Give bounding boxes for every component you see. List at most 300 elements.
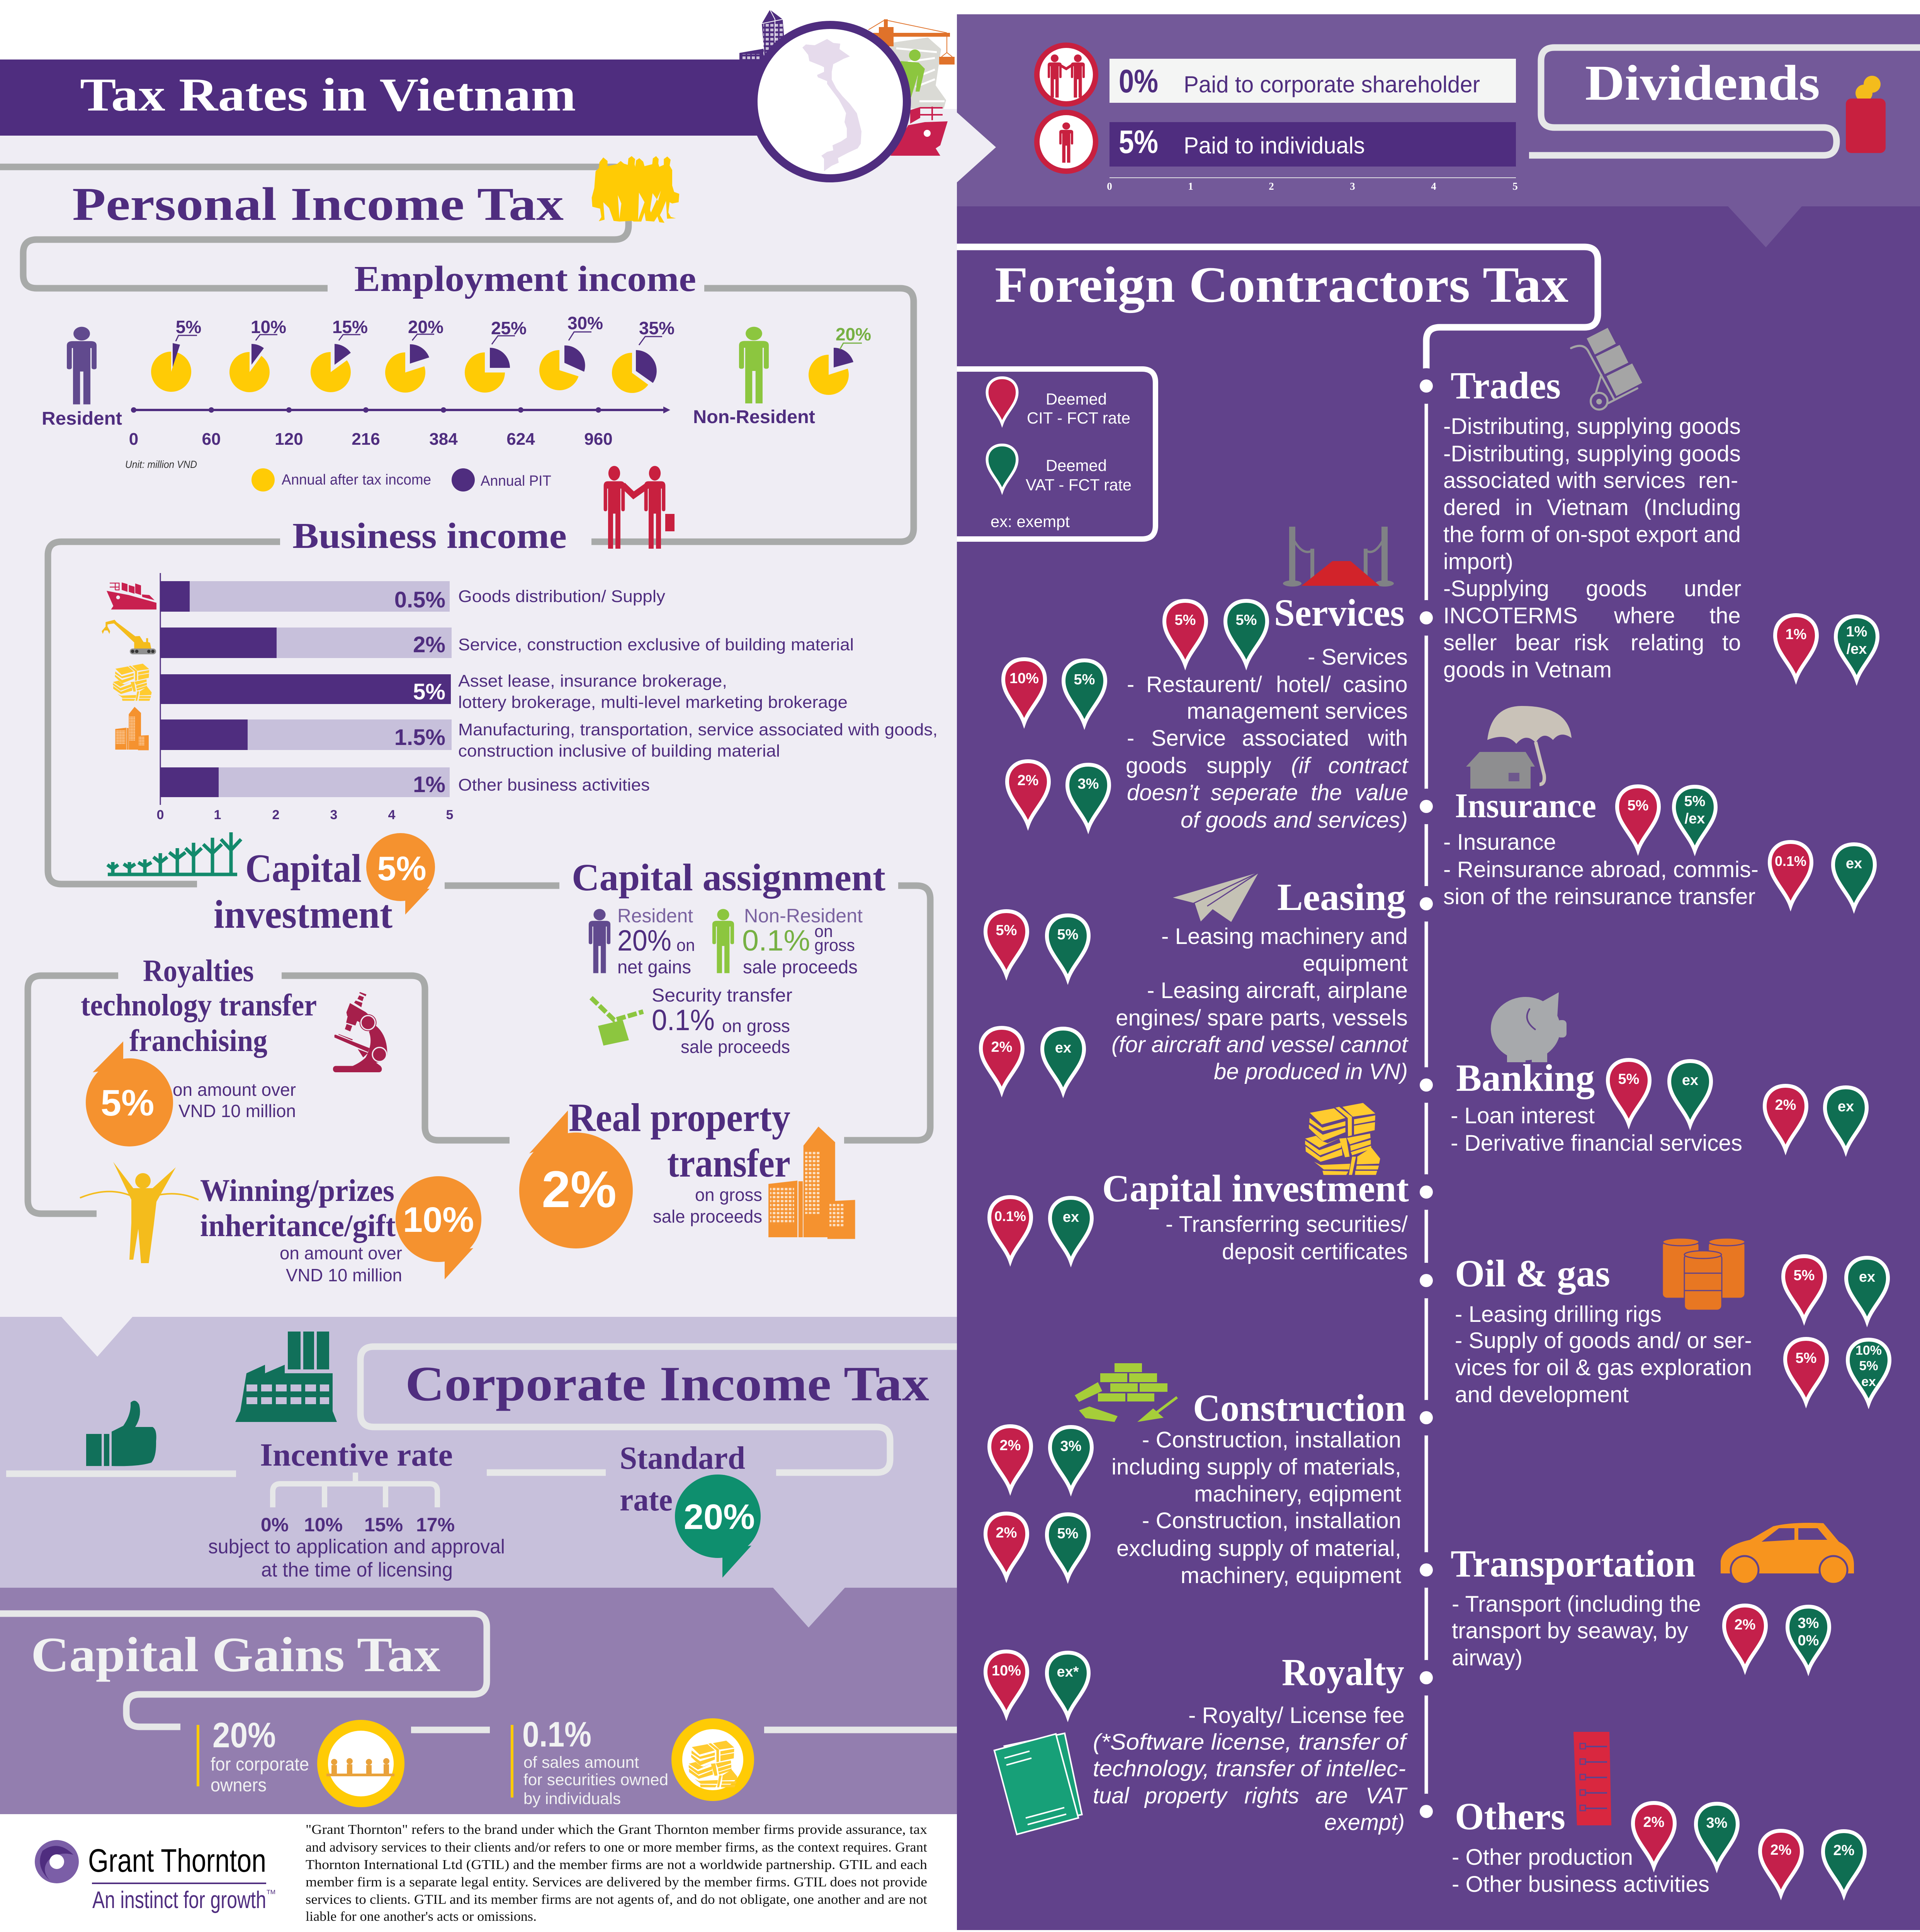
- rates: insurance: /ex: [1685, 811, 1705, 827]
- text: royalty description: tual: [1093, 1783, 1130, 1808]
- text: incentive rate note: subject to application and approval: [208, 1536, 505, 1558]
- footer: legal disclaimer: and advisory services to their clients and/or refers to one or more member firms, as the context requires. Grant: [306, 1840, 927, 1855]
- text: capital investment description: deposit certificates: [1222, 1239, 1408, 1264]
- block: individuals rate: [511, 1715, 668, 1808]
- heading: banking: Banking: [1456, 1056, 1595, 1099]
- panel: capital gains tax background: [0, 1588, 957, 1814]
- text: services description: associated: [1242, 726, 1349, 751]
- callout: winnings 10%: 10%: [403, 1200, 474, 1240]
- rates: insurance: ex: [1846, 855, 1862, 872]
- rates: oil and gas: ex: [1859, 1269, 1875, 1285]
- panel: personal income tax background: [0, 109, 957, 1317]
- text: real property base: [653, 1185, 762, 1226]
- text: services description: seperate: [1211, 780, 1298, 805]
- rates: insurance: 5%: [1628, 798, 1648, 814]
- rates: others: 2%: [1770, 1842, 1791, 1858]
- text: oil and gas description: [1455, 1302, 1752, 1407]
- icon: non-resident person: [739, 327, 769, 403]
- text: capital investment description: - Transferring securities/: [1166, 1212, 1408, 1237]
- text: trades description: seller: [1443, 630, 1497, 655]
- heading: others: Others: [1455, 1795, 1565, 1838]
- text: construction description: - Construction, installation: [1142, 1508, 1401, 1533]
- arrow: pointer from dividends: [1728, 206, 1802, 247]
- chart: income axis with thresholds: 960: [584, 430, 613, 449]
- text: royalty description: rights: [1244, 1783, 1299, 1808]
- heading: royalty: Royalty: [1282, 1651, 1404, 1694]
- chart: dividend bars: Paid to corporate shareholder: [1184, 71, 1480, 97]
- rates: services: 3%: [1078, 776, 1099, 792]
- chart: business income bars: 5: [446, 808, 453, 822]
- icon: handshake: [604, 466, 675, 549]
- heading: insurance: Insurance: [1455, 787, 1596, 825]
- text: transportation description: [1452, 1592, 1701, 1670]
- rates: royalty: ex*: [1057, 1664, 1079, 1680]
- connector lines: [0, 1614, 957, 1730]
- icon: corporate shareholders: [1037, 45, 1096, 104]
- legend: pin colours: CIT - FCT rate: [1027, 409, 1130, 427]
- footer: legal disclaimer: liable for one another's acts or omissions.: [306, 1909, 537, 1924]
- text: services description: supply: [1206, 753, 1271, 778]
- block: capital assignment non-resident: [712, 905, 863, 978]
- text: incentive rate values: [261, 1514, 455, 1536]
- legend: pie colours: Annual after tax income: [282, 472, 431, 488]
- text: incentive rate values: 17%: [416, 1514, 455, 1536]
- chart: dividend bars: 2: [1269, 180, 1274, 192]
- rates: banking: [1608, 1060, 1867, 1151]
- chart: dividend bars: 1: [1188, 180, 1193, 192]
- arrow: pointer into dividends: [957, 112, 996, 182]
- text: services description: contract: [1328, 753, 1409, 778]
- text: winnings threshold: [280, 1243, 402, 1285]
- icon: excavator: [102, 620, 156, 654]
- text: insurance description: - Insurance: [1443, 830, 1556, 855]
- text: services description: the: [1311, 780, 1342, 805]
- rates: oil and gas: ex: [1861, 1374, 1876, 1389]
- block: security transfer: [652, 985, 792, 1057]
- text: services description: with: [1368, 726, 1408, 751]
- chart: income axis with thresholds: [129, 406, 670, 449]
- callout: royalties 5%: 5%: [101, 1082, 154, 1124]
- block: capital investment: [989, 1103, 1409, 1264]
- text: services description: casino: [1343, 672, 1408, 697]
- heading: real property transfer: [569, 1095, 790, 1185]
- chart: business income bars: Goods distribution/ Supply: [458, 587, 665, 606]
- footer: Grant Thornton logo: An instinct for growth: [92, 1887, 266, 1913]
- heading: foreign contractors tax: Foreign Contractors Tax: [995, 256, 1568, 313]
- footer: legal disclaimer: services to clients. GTIL and its member firms are not agents of, and do not obligate, one another and are not: [306, 1892, 927, 1907]
- text: oil and gas description: - Supply of goods and/ or ser-: [1455, 1328, 1752, 1353]
- icon: orange buildings: [768, 1127, 855, 1239]
- label: non-resident: Non-Resident: [693, 407, 815, 427]
- text: royalty description: exempt): [1324, 1810, 1405, 1835]
- text: trades description: under: [1684, 576, 1741, 601]
- text: trades description: Vietnam: [1547, 495, 1629, 520]
- legend: pin colours: Deemed: [1046, 390, 1107, 408]
- block: capital assignment non-resident: gross: [814, 936, 855, 955]
- chart: business income bars: 1%: [413, 772, 445, 797]
- heading: services: Services: [1274, 591, 1405, 634]
- block: capital assignment resident: on: [676, 936, 695, 955]
- section: capital gains tax: [0, 1614, 957, 1808]
- text: banking description: [1451, 1103, 1742, 1156]
- heading: employment income: Employment income: [354, 259, 696, 299]
- chart: dividend bars: [1107, 59, 1518, 192]
- text: royalty description: technology, transfer of intellec-: [1093, 1756, 1406, 1781]
- text: trades description: goods in Vetnam: [1443, 657, 1612, 682]
- chart: progressive tax rate pies: 15%: [332, 317, 368, 337]
- rates: others: 3%: [1706, 1815, 1727, 1831]
- text: services description: value: [1355, 780, 1409, 805]
- rates: trades: 1%: [1786, 626, 1806, 643]
- block: oil and gas: [1455, 1238, 1889, 1407]
- text: incentive rate values: 0%: [261, 1514, 289, 1536]
- heading: winning, prizes, inheritance, gift: Winning/prizes: [200, 1173, 394, 1208]
- text: leasing description: - Leasing aircraft, airplane: [1147, 978, 1408, 1003]
- callout: real property 2%: [519, 1111, 633, 1248]
- text: trades description: risk: [1574, 630, 1609, 655]
- icon: resident person: [67, 327, 97, 404]
- footer: Grant Thornton logo: Grant Thornton: [88, 1842, 266, 1879]
- title: Tax Rates in Vietnam: [80, 69, 576, 121]
- rates: leasing: [981, 911, 1089, 1092]
- icon: runner at finish line: [80, 1162, 199, 1263]
- block: individuals rate: 0.1%: [522, 1715, 591, 1754]
- block: banking: [1451, 992, 1867, 1156]
- text: winnings threshold: VND 10 million: [286, 1265, 402, 1285]
- text: services description: -: [1127, 672, 1134, 697]
- block: royalty: [985, 1651, 1408, 1835]
- bracket: incentive rates: [273, 1473, 437, 1507]
- block: leasing: [981, 872, 1409, 1092]
- legend: pin colours: ex: exempt: [991, 512, 1070, 531]
- icon: money stack: [113, 664, 152, 701]
- title banner: [0, 60, 773, 136]
- chart: dividend bars: 0: [1107, 180, 1112, 192]
- text: insurance description: sion of the reinsurance transfer: [1443, 884, 1755, 909]
- chart: business income bars: Service, construction exclusive of building material: [458, 635, 854, 654]
- section: foreign contractors tax: [957, 247, 1889, 1897]
- icon: piggy bank: [1491, 992, 1567, 1062]
- rates: trades: /ex: [1847, 641, 1867, 657]
- heading: standard rate: [620, 1440, 745, 1518]
- text: services description: (if: [1291, 753, 1312, 778]
- rates: others: [1633, 1803, 1865, 1895]
- text: construction description: - Construction, installation: [1142, 1427, 1401, 1452]
- rates: construction: 3%: [1060, 1438, 1081, 1454]
- text: incentive rate note: at the time of licensing: [261, 1559, 453, 1581]
- text: services description: Service: [1151, 726, 1226, 751]
- text: banking description: - Derivative financial services: [1451, 1131, 1742, 1156]
- rates: insurance: [1617, 786, 1875, 908]
- rates: transportation: 3%: [1798, 1615, 1819, 1631]
- text: transportation description: - Transport (including the: [1452, 1592, 1701, 1617]
- rates: banking: 5%: [1618, 1071, 1639, 1087]
- rates: capital investment: [989, 1197, 1092, 1262]
- rates: royalty: [985, 1651, 1089, 1716]
- footer: Grant Thornton logo: [35, 1840, 275, 1913]
- chart: business income bars: 5%: [413, 679, 445, 704]
- block: trades: [1443, 328, 1878, 682]
- text: incentive rate note: [208, 1536, 505, 1581]
- block: individuals rate: for securities owned: [523, 1770, 668, 1789]
- block: security transfer: Security transfer: [652, 985, 792, 1006]
- block: transportation: [1451, 1523, 1854, 1670]
- icon: individual: [1037, 112, 1096, 171]
- text: leasing description: - Leasing machinery and: [1161, 924, 1408, 949]
- heading: personal income tax: Personal Income Tax: [72, 178, 564, 230]
- block: corporate owners rate: owners: [211, 1775, 267, 1796]
- chart: income axis with thresholds: 120: [275, 430, 303, 449]
- chart: business income bars: lottery brokerage, multi-level marketing brokerage: [458, 693, 848, 712]
- text: insurance description: [1443, 830, 1759, 909]
- rates: capital investment: ex: [1063, 1209, 1079, 1225]
- callout: standard rate 20%: [675, 1475, 761, 1578]
- rates: construction: 2%: [1000, 1437, 1021, 1454]
- legend: pie colours: Annual PIT: [481, 473, 551, 489]
- legend: pin colours: Deemed: [1046, 456, 1107, 474]
- text: construction description: machinery, equipment: [1181, 1563, 1401, 1588]
- text: trades description: in: [1515, 495, 1533, 520]
- icon: orange building: [115, 707, 149, 750]
- block: capital assignment resident: [589, 905, 695, 978]
- text: trades description: bear: [1515, 630, 1560, 655]
- chart: business income bars: construction inclusive of building material: [458, 742, 780, 760]
- footer: legal disclaimer: [306, 1822, 928, 1924]
- chart: progressive tax rate pies: 20%: [408, 317, 443, 337]
- rates: banking: 2%: [1775, 1097, 1796, 1113]
- rates: trades: [1775, 615, 1878, 680]
- block: individuals rate: of sales amount: [523, 1753, 639, 1771]
- rates: construction: [985, 1426, 1092, 1578]
- block: construction: [985, 1363, 1406, 1588]
- chart: income axis with thresholds: 624: [506, 430, 535, 449]
- rates: oil and gas: [1783, 1256, 1889, 1403]
- legend: pie colours: [251, 468, 551, 492]
- callout: capital investment 5%: 5%: [377, 849, 426, 888]
- timeline: [1409, 368, 1444, 1829]
- rates: oil and gas: 5%: [1859, 1359, 1878, 1373]
- legend: pin colours: [957, 369, 1155, 539]
- rates: leasing: 5%: [996, 922, 1017, 939]
- icon: money stack: [1305, 1103, 1380, 1175]
- text: trades description: to: [1722, 630, 1741, 655]
- block: capital assignment resident: Resident: [617, 905, 693, 927]
- block: capital assignment non-resident: on: [814, 922, 833, 941]
- block: services: [1003, 527, 1409, 833]
- icon: Vietnam map in circle: [753, 25, 907, 179]
- note: unit: Unit: million VND: [125, 459, 197, 470]
- heading: business income: Business income: [292, 516, 567, 556]
- icon: ship: [107, 582, 156, 609]
- block: capital assignment non-resident: sale proceeds: [743, 957, 858, 978]
- text: trades description: -Distributing, supplying goods: [1443, 441, 1741, 466]
- footer: legal disclaimer: "Grant Thornton" refers to the brand under which the Grant Thornton member firms provide assurance, tax: [306, 1822, 928, 1837]
- text: transportation description: airway): [1452, 1645, 1522, 1670]
- text: banking description: - Loan interest: [1451, 1103, 1595, 1128]
- chart: business income bars: 4: [388, 808, 396, 822]
- rates: transportation: 0%: [1798, 1633, 1819, 1649]
- icon: red carpet: [1283, 527, 1394, 587]
- chart: business income bars: 0: [157, 808, 164, 822]
- text: royalties threshold: on amount over: [173, 1080, 296, 1100]
- text: trades description: import): [1443, 549, 1513, 574]
- rates: leasing: ex: [1055, 1040, 1071, 1056]
- heading: construction: Construction: [1193, 1386, 1406, 1429]
- chart: business income bars: 3: [330, 808, 337, 822]
- heading: transportation: Transportation: [1451, 1542, 1696, 1585]
- arrow: pointer into capital gains tax: [773, 1588, 845, 1628]
- chart: income axis with thresholds: 0: [129, 430, 138, 449]
- rates: insurance: 0.1%: [1775, 853, 1806, 869]
- heading: royalties: Royalties: [143, 954, 254, 988]
- label: resident: Resident: [42, 408, 122, 429]
- text: leasing description: be produced in VN): [1214, 1059, 1408, 1084]
- heading: standard rate: rate: [620, 1482, 673, 1518]
- rates: services: 10%: [1009, 670, 1039, 687]
- text: trades description: relating: [1631, 630, 1704, 655]
- text: trades description: with: [1556, 468, 1597, 493]
- rates: construction: 5%: [1057, 1526, 1078, 1542]
- rates: oil and gas: 5%: [1794, 1267, 1815, 1284]
- text: services description: [1126, 645, 1409, 833]
- text: trades description: ren-: [1698, 468, 1738, 493]
- text: services description: of goods and services): [1181, 808, 1408, 833]
- chart: business income bars: Manufacturing, transportation, service associated with goods,: [458, 720, 938, 739]
- rates: transportation: 2%: [1735, 1617, 1755, 1633]
- text: oil and gas description: vices for oil & gas exploration: [1455, 1355, 1752, 1380]
- text: royalties threshold: [173, 1080, 296, 1121]
- text: leasing description: (for aircraft and vessel cannot: [1111, 1032, 1409, 1057]
- panel: dividends background: [957, 14, 1920, 206]
- header illustration: city, crane, worker and ship: [739, 10, 955, 156]
- text: others description: - Other business activities: [1452, 1872, 1709, 1897]
- text: royalty description: are: [1315, 1783, 1348, 1808]
- rates: construction: 2%: [996, 1525, 1017, 1541]
- chart: progressive tax rate pies: 35%: [639, 318, 675, 338]
- heading: corporate income tax: Corporate Income Tax: [405, 1356, 929, 1411]
- text: royalty description: [1093, 1703, 1408, 1835]
- chart: business income bars: 1.5%: [394, 725, 445, 750]
- chart: progressive tax rate pies: 30%: [568, 313, 603, 333]
- heading: capital investment: Capital: [245, 846, 362, 891]
- text: leasing description: equipment: [1303, 951, 1408, 976]
- heading: trades: Trades: [1451, 364, 1561, 407]
- footer: legal disclaimer: member firm is a separate legal entity. Services are delivered by the member firms. GTIL does not provide: [306, 1874, 927, 1889]
- icon: paper plane: [1173, 872, 1259, 922]
- text: trades description: -Distributing, supplying goods: [1443, 414, 1741, 439]
- text: incentive rate values: 15%: [364, 1514, 403, 1536]
- text: services description: hotel/: [1276, 672, 1331, 697]
- chart: dividend bars: Paid to individuals: [1184, 133, 1365, 158]
- heading: incentive rate: Incentive rate: [260, 1437, 453, 1473]
- icon: coin jar: [1846, 76, 1886, 153]
- block: security transfer: sale proceeds: [681, 1037, 790, 1057]
- block: capital assignment non-resident: Non-Resident: [744, 905, 863, 927]
- icon: books: [994, 1733, 1082, 1834]
- icon: hand truck with boxes: [1571, 328, 1642, 410]
- chart: dividend bars: 3: [1350, 180, 1355, 192]
- heading: real property transfer: transfer: [667, 1141, 790, 1185]
- text: trades description: the form of on-spot export and: [1443, 522, 1741, 547]
- text: trades description: dered: [1443, 495, 1500, 520]
- callout: capital investment 5%: [366, 833, 435, 915]
- text: trades description: [1443, 414, 1741, 682]
- heading: oil and gas: Oil & gas: [1455, 1252, 1610, 1295]
- text: real property base: sale proceeds: [653, 1206, 762, 1226]
- chart: progressive tax rate pies: [151, 313, 871, 395]
- rates: services: 5%: [1074, 672, 1095, 688]
- text: services description: doesn’t: [1127, 780, 1200, 805]
- heading: capital assignment: Capital assignment: [572, 856, 885, 899]
- icon: oil barrels: [1662, 1238, 1745, 1310]
- rates: oil and gas: 10%: [1855, 1343, 1882, 1358]
- text: transportation description: transport by seaway, by: [1452, 1618, 1688, 1643]
- icon: factory: [235, 1332, 337, 1422]
- rates: others: 2%: [1833, 1842, 1854, 1859]
- text: royalty description: property: [1144, 1783, 1228, 1808]
- rates: oil and gas: 5%: [1796, 1350, 1816, 1366]
- chart: income axis with thresholds: 60: [202, 430, 221, 449]
- text: winnings threshold: on amount over: [280, 1243, 402, 1263]
- text: construction description: including supply of materials,: [1111, 1454, 1401, 1480]
- rates: trades: 1%: [1846, 624, 1867, 640]
- text: construction description: machinery, eqipment: [1194, 1481, 1401, 1507]
- rates: transportation: [1724, 1605, 1829, 1670]
- rates: services: [1003, 601, 1267, 828]
- rates: services: 2%: [1018, 772, 1038, 789]
- rates: capital investment: 0.1%: [994, 1208, 1026, 1224]
- rates: banking: ex: [1838, 1099, 1854, 1115]
- icon: thumbs up: [86, 1401, 156, 1466]
- heading box line: [1529, 48, 1920, 155]
- chart: business income bars: 0.5%: [394, 587, 445, 612]
- panel: corporate income tax background: [0, 1317, 957, 1588]
- heading: leasing: Leasing: [1277, 876, 1406, 918]
- chart: dividend bars: 4: [1431, 180, 1436, 192]
- text: trades description: INCOTERMS: [1443, 603, 1578, 628]
- callout: winnings 10%: [396, 1176, 481, 1279]
- heading: capital investment: Capital investment: [1102, 1167, 1409, 1210]
- callout: standard rate 20%: 20%: [684, 1497, 755, 1537]
- icon: meeting table in circle: [323, 1725, 399, 1802]
- icon: car: [1721, 1523, 1854, 1584]
- rates: leasing: 2%: [991, 1039, 1012, 1055]
- text: services description: -: [1127, 726, 1134, 751]
- footer: Grant Thornton logo: TM: [267, 1889, 275, 1896]
- heading: royalties: [81, 954, 317, 1058]
- text: royalty description: - Royalty/ License fee: [1188, 1703, 1405, 1728]
- connector lines: [6, 1347, 957, 1474]
- block: security transfer: 0.1%: [652, 1004, 715, 1037]
- text: others description: [1452, 1845, 1709, 1897]
- chart: business income bars: Other business activities: [458, 776, 650, 794]
- section: corporate income tax: [6, 1332, 957, 1581]
- block: capital assignment resident: 20%: [617, 924, 671, 957]
- chart: business income bars: [157, 573, 938, 822]
- heading: capital gains tax: Capital Gains Tax: [31, 1627, 440, 1682]
- chart: income axis with thresholds: 384: [429, 430, 458, 449]
- text: oil and gas description: and development: [1455, 1382, 1629, 1407]
- heading: standard rate: Standard: [620, 1440, 745, 1476]
- icon: growing sprouts: [107, 832, 241, 875]
- text: real property base: on gross: [695, 1185, 762, 1205]
- chart: dividend bars: 5%: [1119, 124, 1158, 160]
- connector lines: [0, 167, 930, 1214]
- heading: royalties: franchising: [129, 1024, 267, 1058]
- rates: services: 5%: [1175, 612, 1196, 628]
- text: trades description: (Including: [1644, 495, 1741, 520]
- text: royalties threshold: VND 10 million: [178, 1101, 296, 1121]
